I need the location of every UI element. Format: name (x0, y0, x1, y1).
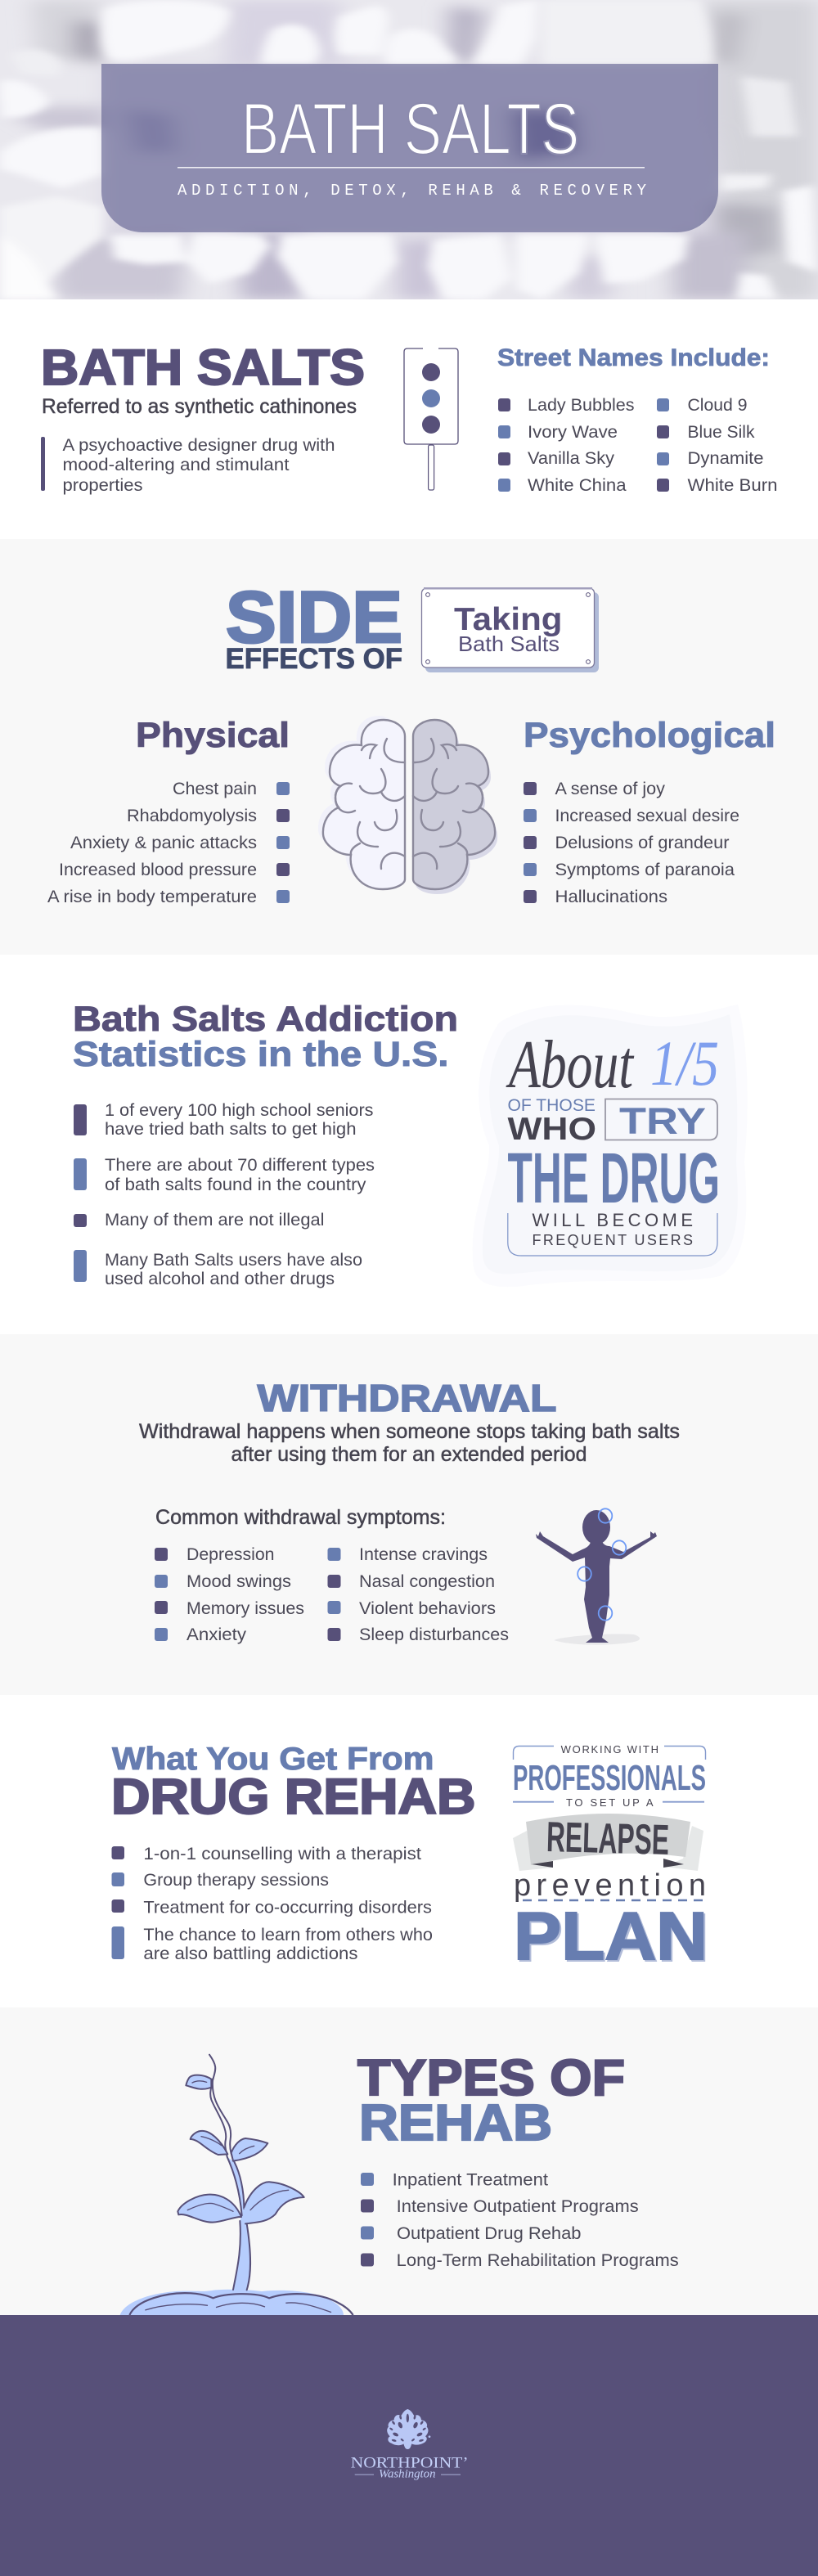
main title: BATH SALTS (241, 88, 579, 169)
list: rehab benefits: 1-on-1 counselling with a therapist (143, 1844, 421, 1863)
panel: withdrawal (0, 1334, 818, 1695)
callout: relapse prevention plan: TO SET UP A (566, 1796, 654, 1809)
callout: about one fifth: TRY (619, 1100, 706, 1142)
list: street names: Vanilla Sky (528, 448, 614, 468)
list: rehab benefits (111, 1844, 433, 1963)
ribbon: RELAPSE (546, 1814, 670, 1864)
list: physical effects: Anxiety & panic attacks (70, 833, 257, 852)
description with side bar: properties (62, 475, 142, 495)
list: statistics: of bath salts found in the country (105, 1175, 366, 1194)
callout: about one fifth: OF THOSE (507, 1096, 596, 1115)
list: physical effects: Increased blood pressure (59, 860, 257, 879)
list: rehab benefits: The chance to learn from others who (143, 1925, 433, 1944)
callout: relapse prevention plan: PROFESSIONALS (513, 1758, 706, 1798)
heading: statistics: Statistics in the U.S. (73, 1035, 448, 1074)
list: statistics: used alcohol and other drugs (105, 1269, 335, 1288)
callout: relapse prevention plan: prevention (514, 1868, 706, 1903)
list: psychological effects: A sense of joy (555, 779, 665, 798)
list: psychological effects: Hallucinations (555, 887, 667, 906)
icon: human figure with pain points (536, 1508, 657, 1645)
stem (209, 2055, 250, 2290)
plate: taking bath salts: Bath Salts (458, 632, 560, 656)
icon: peacock lotus (387, 2409, 430, 2449)
description with side bar: A psychoactive designer drug with (62, 435, 335, 455)
plate: taking bath salts (422, 587, 599, 672)
list: rehab benefits: are also battling addictions (143, 1944, 357, 1963)
list: statistics: have tried bath salts to get high (105, 1119, 356, 1139)
heading: side effects of: SIDE (226, 576, 402, 658)
heading: what you get from drug rehab: DRUG REHAB (111, 1769, 476, 1824)
panel: hero header (0, 0, 818, 299)
list: street names (498, 395, 777, 495)
list: statistics (74, 1100, 375, 1288)
illustration: sprouting plant (120, 2055, 353, 2315)
list: symptoms: Depression (187, 1544, 275, 1564)
heading: what you get from drug rehab (111, 1742, 476, 1824)
list: symptoms: Sleep disturbances (359, 1625, 509, 1644)
list: psychological effects: Delusions of grandeur (555, 833, 730, 852)
subheading: Referred to as synthetic cathinones (42, 395, 357, 418)
heading: street names: Street Names Include: (497, 344, 770, 371)
heading: side effects of: EFFECTS OF (226, 643, 402, 675)
list: street names: Blue Silk (687, 422, 755, 442)
title banner (101, 64, 718, 232)
panel: types of rehab (0, 2007, 818, 2315)
description with side bar (41, 435, 335, 495)
list: physical effects: Rhabdomyolysis (127, 806, 257, 825)
heading: withdrawal: WITHDRAWAL (257, 1377, 556, 1419)
heading: statistics (73, 1000, 458, 1074)
list: statistics: Many Bath Salts users have also (105, 1250, 362, 1270)
description with side bar: mood-altering and stimulant (62, 455, 290, 474)
list: street names: Dynamite (687, 448, 764, 468)
list: rehab types (361, 2169, 679, 2270)
plate: taking bath salts: Taking (454, 602, 563, 637)
soil mound (120, 2290, 353, 2315)
list: street names: White China (528, 475, 627, 495)
list: street names: Cloud 9 (687, 395, 748, 415)
icon: brain (318, 716, 497, 894)
list: symptoms: Violent behaviors (359, 1598, 496, 1618)
logo: northpoint washington: Washington (379, 2467, 435, 2480)
left hemisphere (323, 720, 405, 889)
callout: relapse prevention plan: PLAN (514, 1898, 708, 1974)
list: physical effects (47, 779, 290, 906)
list: psychological effects: Symptoms of paranoia (555, 860, 735, 879)
list: symptoms: Intense cravings (359, 1544, 488, 1564)
panel: addiction statistics (0, 955, 818, 1334)
list: statistics: 1 of every 100 high school seniors (105, 1100, 373, 1120)
list: psychological effects: Increased sexual desire (555, 806, 739, 825)
list: symptoms: Nasal congestion (359, 1571, 495, 1591)
list: psychological effects (524, 779, 739, 906)
heading: psychological: Psychological (524, 716, 775, 755)
list: symptoms: Anxiety (187, 1625, 246, 1644)
list: symptoms: Memory issues (187, 1598, 304, 1618)
logo: northpoint washington (351, 2409, 469, 2480)
callout: about one fifth: 1/5 (650, 1027, 719, 1099)
panel: drug rehab (0, 1695, 818, 2007)
heading: bath salts: BATH SALTS (41, 339, 365, 395)
heading: types of rehab (357, 2050, 625, 2151)
panel: side effects (0, 539, 818, 955)
list: statistics: Many of them are not illegal (105, 1210, 324, 1230)
list: statistics: There are about 70 different types (105, 1155, 375, 1175)
list: rehab benefits: Treatment for co-occurring disorders (143, 1898, 432, 1917)
list: rehab benefits: Group therapy sessions (143, 1870, 329, 1890)
heading: types of rehab: TYPES OF (357, 2050, 625, 2106)
callout: relapse prevention plan (513, 1743, 709, 1976)
panel: footer (0, 2315, 818, 2576)
withdrawal description: after using them for an extended period (231, 1443, 587, 1466)
subtitle: ADDICTION, DETOX, REHAB & RECOVERY (178, 182, 647, 200)
callout: about one fifth: FREQUENT USERS (532, 1232, 693, 1248)
list: symptoms (155, 1544, 509, 1644)
list: physical effects: Chest pain (173, 779, 257, 798)
callout: about one fifth: WILL BECOME (532, 1210, 693, 1230)
list: street names: White Burn (687, 475, 777, 495)
list: physical effects: A rise in body temperature (47, 887, 257, 906)
heading: types of rehab: REHAB (359, 2095, 552, 2151)
list: symptoms: Mood swings (187, 1571, 291, 1591)
ribbon (513, 1814, 703, 1871)
heading: what you get from drug rehab: What You Get From (112, 1742, 434, 1777)
subheading: common symptoms: Common withdrawal symptoms: (155, 1506, 446, 1529)
callout: relapse prevention plan: PLAN (515, 1899, 709, 1976)
callout: about one fifth: About (506, 1027, 635, 1103)
list: rehab types: Intensive Outpatient Programs (397, 2196, 639, 2216)
list: street names: Ivory Wave (528, 422, 618, 442)
heading: statistics: Bath Salts Addiction (73, 1000, 458, 1039)
withdrawal description: Withdrawal happens when someone stops taking bath salts (139, 1420, 680, 1443)
callout: about one fifth: WHO (507, 1112, 596, 1147)
callout: relapse prevention plan: WORKING WITH (561, 1743, 658, 1756)
withdrawal description (139, 1420, 680, 1466)
list: rehab types: Outpatient Drug Rehab (397, 2223, 582, 2243)
icon: traffic light (404, 348, 458, 490)
callout: about one fifth (473, 1005, 748, 1287)
list: rehab types: Inpatient Treatment (393, 2169, 548, 2189)
salt crystal photo background (0, 0, 818, 299)
leaves (178, 2075, 304, 2223)
logo: northpoint washington: NORTHPOINT’ (351, 2454, 469, 2472)
right hemisphere (413, 720, 495, 889)
panel: bath salts intro (0, 299, 818, 539)
heading: physical: Physical (136, 716, 290, 755)
list: rehab types: Long-Term Rehabilitation Programs (397, 2250, 679, 2270)
list: street names: Lady Bubbles (528, 395, 635, 415)
